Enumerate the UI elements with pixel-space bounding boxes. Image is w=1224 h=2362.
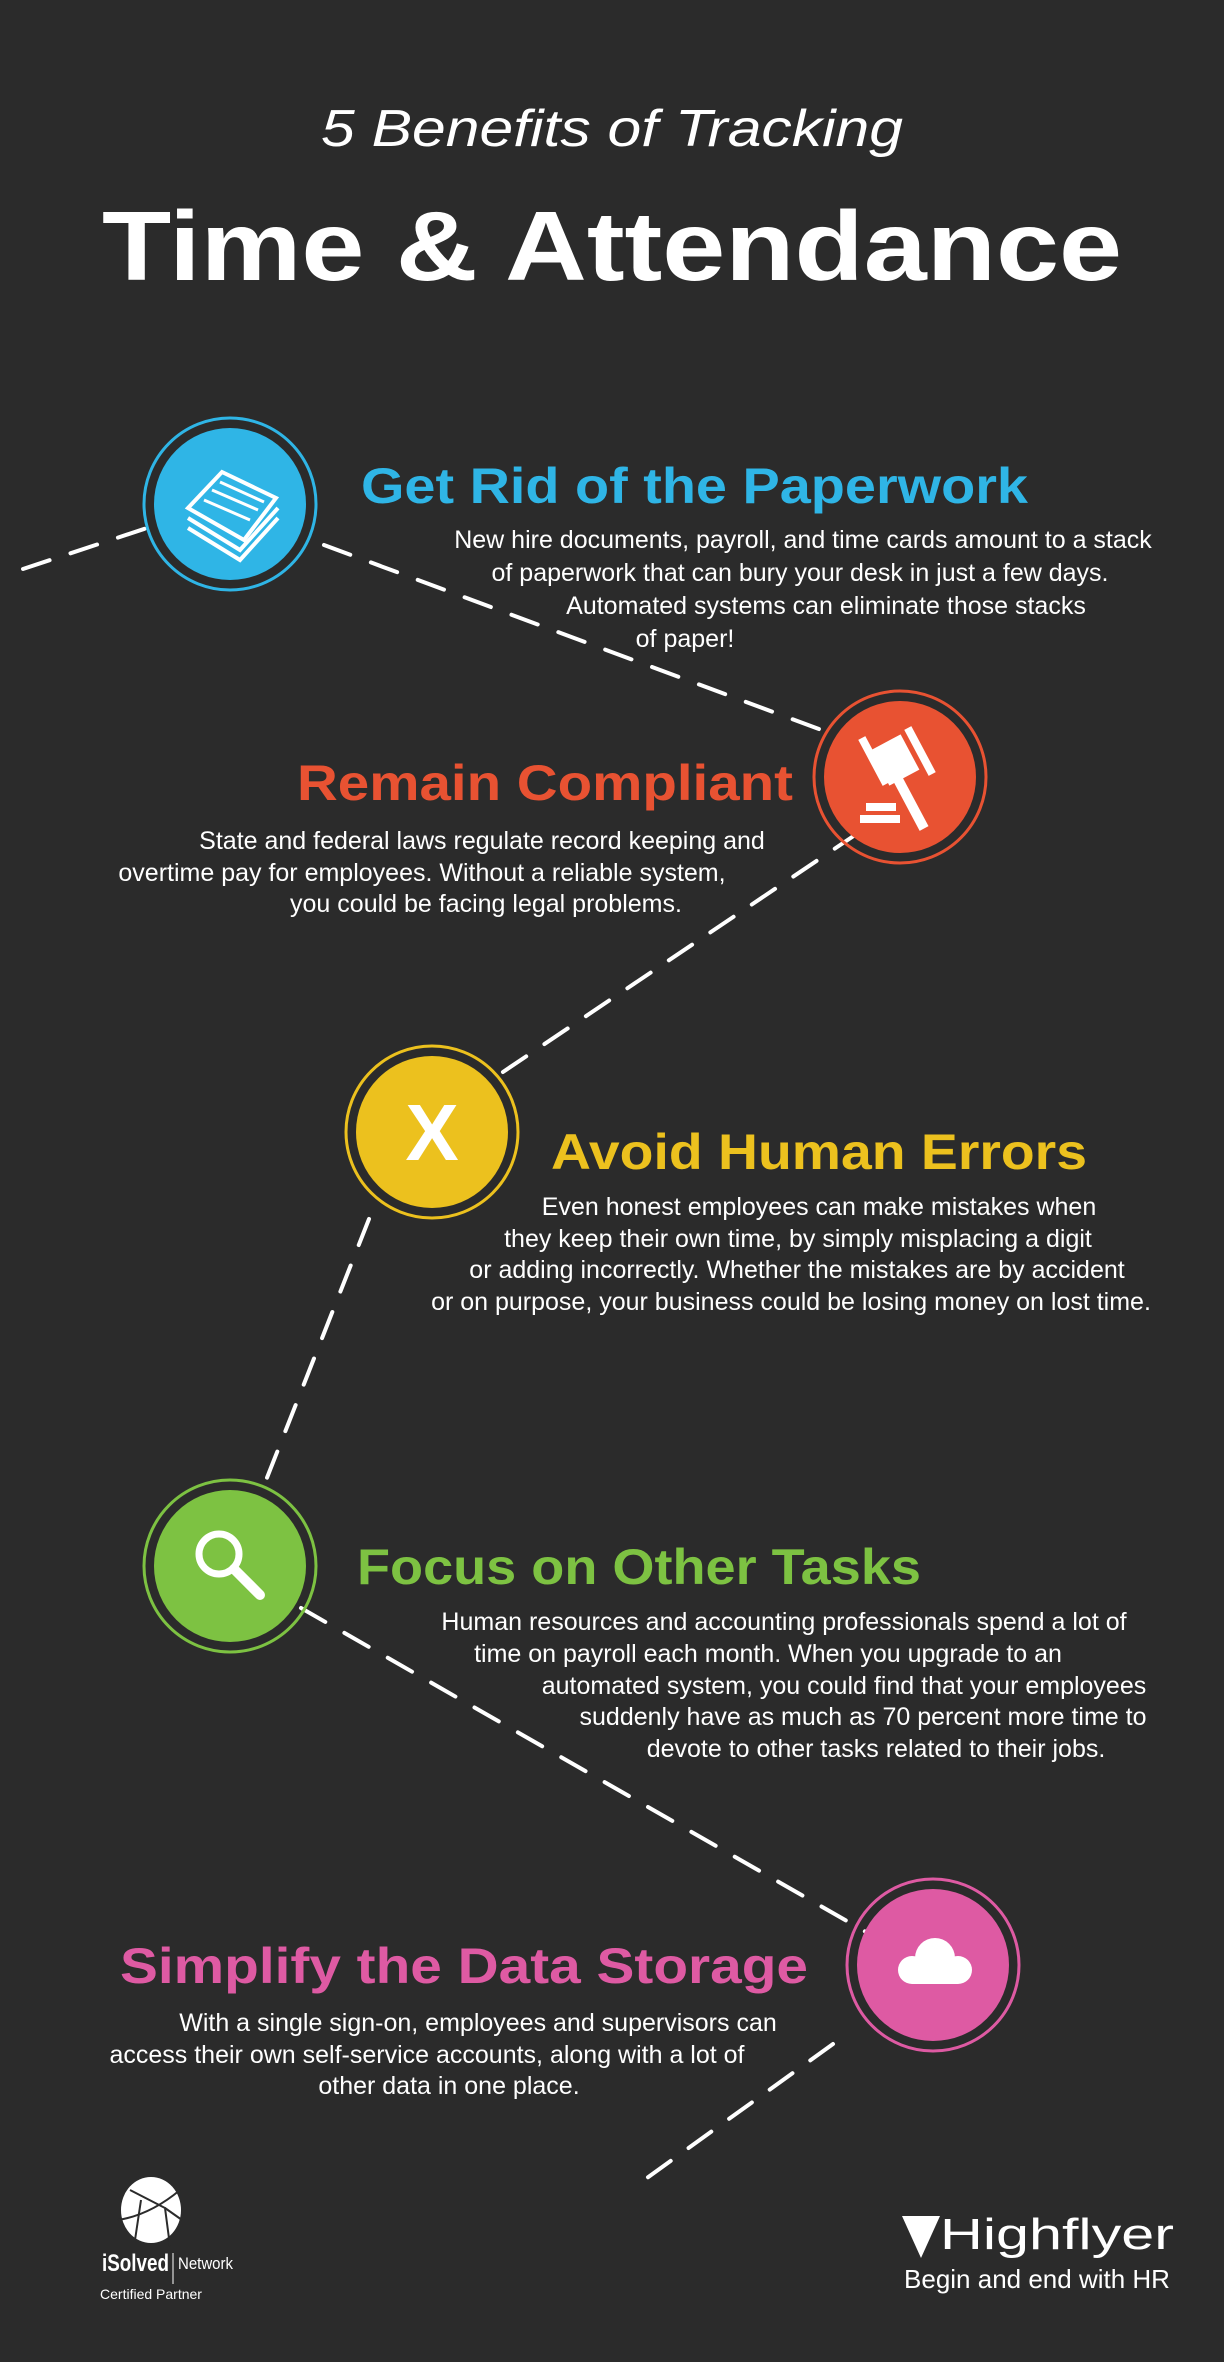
logo: iSolved: Network [178,2254,233,2273]
body text: devote to other tasks related to their jobs. [647,1735,1105,1763]
body text: or on purpose, your business could be losing money on lost time. [431,1288,1151,1316]
heading: Avoid Human Errors [551,1124,1087,1180]
logo: Highflyer: Highflyer [940,2210,1174,2259]
body text [454,526,1152,653]
item 2: compliant [118,691,986,918]
icon: X: X [405,1088,459,1177]
title: Time & Attendance [102,191,1122,301]
body text: or adding incorrectly. Whether the mistakes are by accident [469,1256,1125,1284]
body text: automated system, you could find that your employees [542,1672,1146,1700]
body text: they keep their own time, by simply misplacing a digit [504,1225,1092,1253]
body text: Even honest employees can make mistakes when [542,1193,1096,1221]
body text: access their own self-service accounts, along with a lot of [109,2041,745,2069]
body text: of paperwork that can bury your desk in just a few days. [492,559,1108,587]
body text [441,1608,1146,1763]
body text [431,1193,1151,1316]
body text: State and federal laws regulate record keeping and [199,827,765,855]
icon: cloud [847,1879,1019,2051]
heading: Remain Compliant [297,755,793,811]
title: 5 Benefits of Tracking [321,100,903,158]
item 4: other tasks [144,1480,1146,1763]
icon: paper stack [144,418,316,590]
body text: other data in one place. [318,2072,580,2100]
logo: iSolved: Certified Partner [100,2286,202,2302]
body text: overtime pay for employees. Without a reliable system, [118,859,726,887]
logo: Highflyer: Begin and end with HR [904,2264,1170,2294]
icon: X [346,1046,518,1218]
body text [109,2009,777,2100]
dashed connector lines [23,527,866,2183]
heading: Simplify the Data Storage [120,1938,808,1994]
body text: suddenly have as much as 70 percent more time to [580,1703,1146,1731]
item 3: human errors [346,1046,1151,1316]
heading: Focus on Other Tasks [357,1539,921,1595]
body text: of paper! [636,625,734,653]
icon: magnifier [144,1480,316,1652]
item 5: data storage [109,1879,1019,2100]
title [102,100,1122,301]
body text: With a single sign-on, employees and supervisors can [179,2009,777,2037]
heading: Get Rid of the Paperwork [361,458,1028,514]
item 1: paperwork [144,418,1152,653]
body text: time on payroll each month. When you upgrade to an [474,1640,1062,1668]
body text: Human resources and accounting professionals spend a lot of [441,1608,1127,1636]
body text: you could be facing legal problems. [290,890,682,918]
body text [118,827,765,918]
icon: gavel [814,691,986,863]
logo: iSolved [100,2177,233,2302]
logo: Highflyer [902,2210,1174,2294]
logo: iSolved: iSolved [102,2250,169,2277]
body text: Automated systems can eliminate those stacks [566,592,1086,620]
body text: New hire documents, payroll, and time cards amount to a stack [454,526,1152,554]
